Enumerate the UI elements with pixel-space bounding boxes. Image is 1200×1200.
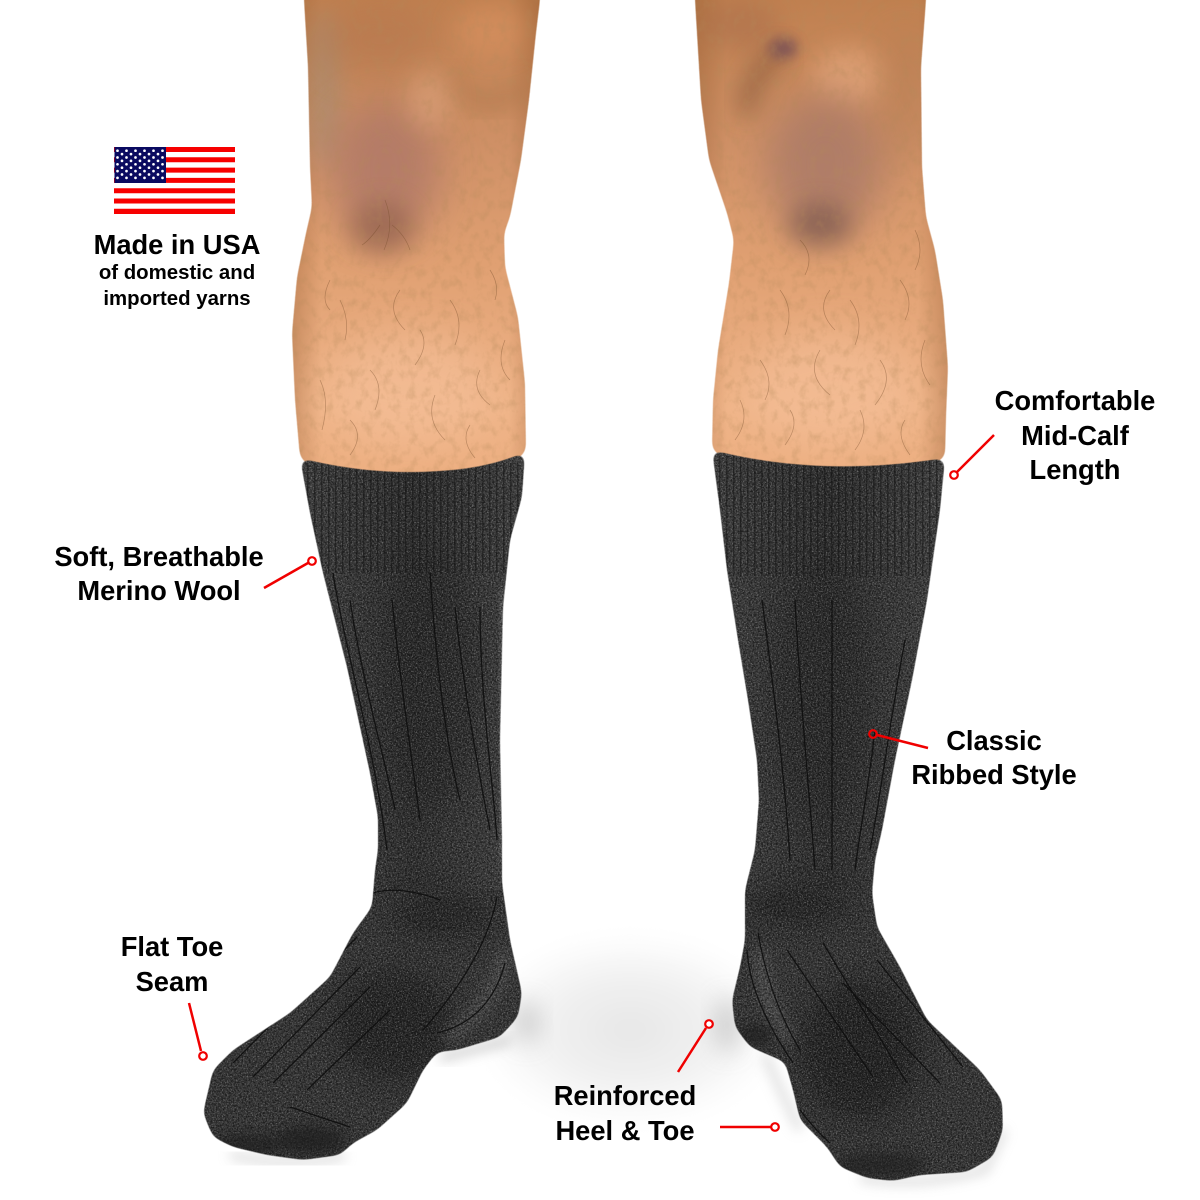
callout: ribbed style — [869, 725, 1077, 790]
callout: reinforced heel and toe — [554, 1020, 779, 1146]
leg hair — [735, 230, 930, 455]
callout: merino wool: Soft, Breathable — [54, 541, 264, 572]
callout: mid-calf length — [950, 385, 1155, 485]
callout: mid-calf length: Mid-Calf — [1021, 420, 1130, 451]
callout: ribbed style: Ribbed Style — [911, 759, 1077, 790]
text: Made in USA: imported yarns — [103, 288, 251, 310]
floor shadow — [230, 935, 1004, 1182]
text: Made in USA: Made in USA — [94, 229, 260, 260]
callout: ribbed style: Classic — [946, 725, 1042, 756]
callout: mid-calf length: Length — [1030, 454, 1120, 485]
left leg skin — [285, 0, 545, 480]
callout: reinforced heel and toe: Reinforced — [554, 1080, 696, 1111]
leg hair — [320, 200, 510, 458]
callout: flat toe seam: Flat Toe — [121, 931, 223, 962]
callout: flat toe seam: Seam — [136, 966, 208, 997]
text: Made in USA: of domestic and — [99, 262, 255, 284]
callout: merino wool — [54, 541, 316, 606]
left sock — [204, 455, 524, 1160]
callout: flat toe seam — [121, 931, 223, 1060]
right sock — [713, 452, 1004, 1181]
right leg skin — [690, 0, 955, 480]
text: Made in USA — [94, 229, 260, 310]
callout: merino wool: Merino Wool — [77, 575, 241, 606]
callout: mid-calf length: Comfortable — [995, 385, 1155, 416]
callout: reinforced heel and toe: Heel & Toe — [555, 1115, 695, 1146]
icon: American flag — [114, 147, 235, 214]
